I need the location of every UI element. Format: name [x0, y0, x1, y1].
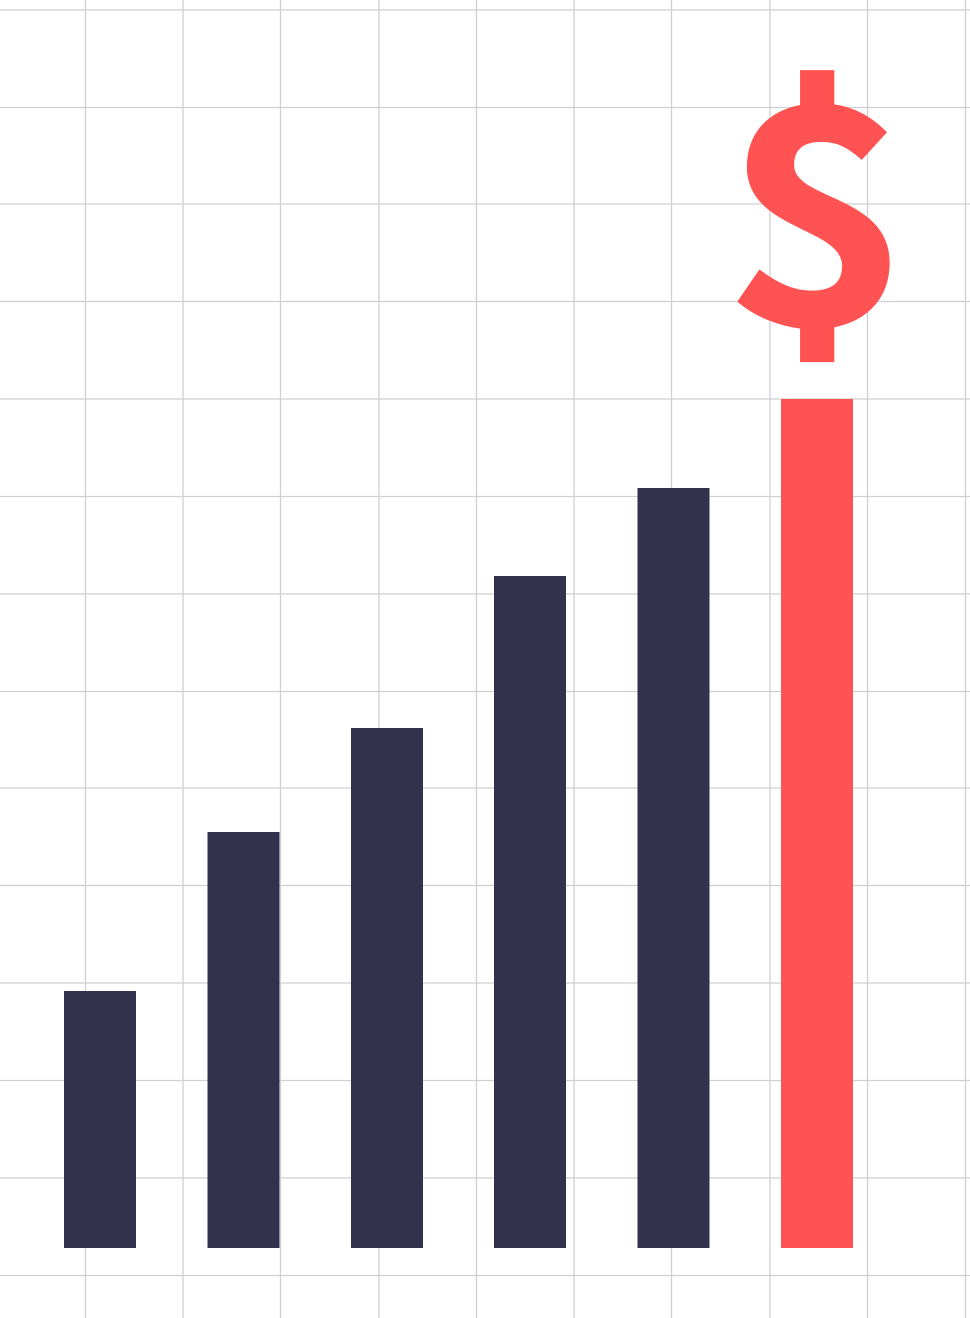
bar 3	[351, 728, 423, 1248]
highlighted bar 6	[781, 399, 853, 1248]
bar 4	[494, 576, 566, 1248]
bar 5	[638, 488, 710, 1248]
bar 1	[64, 991, 136, 1248]
bar 2	[208, 832, 280, 1248]
